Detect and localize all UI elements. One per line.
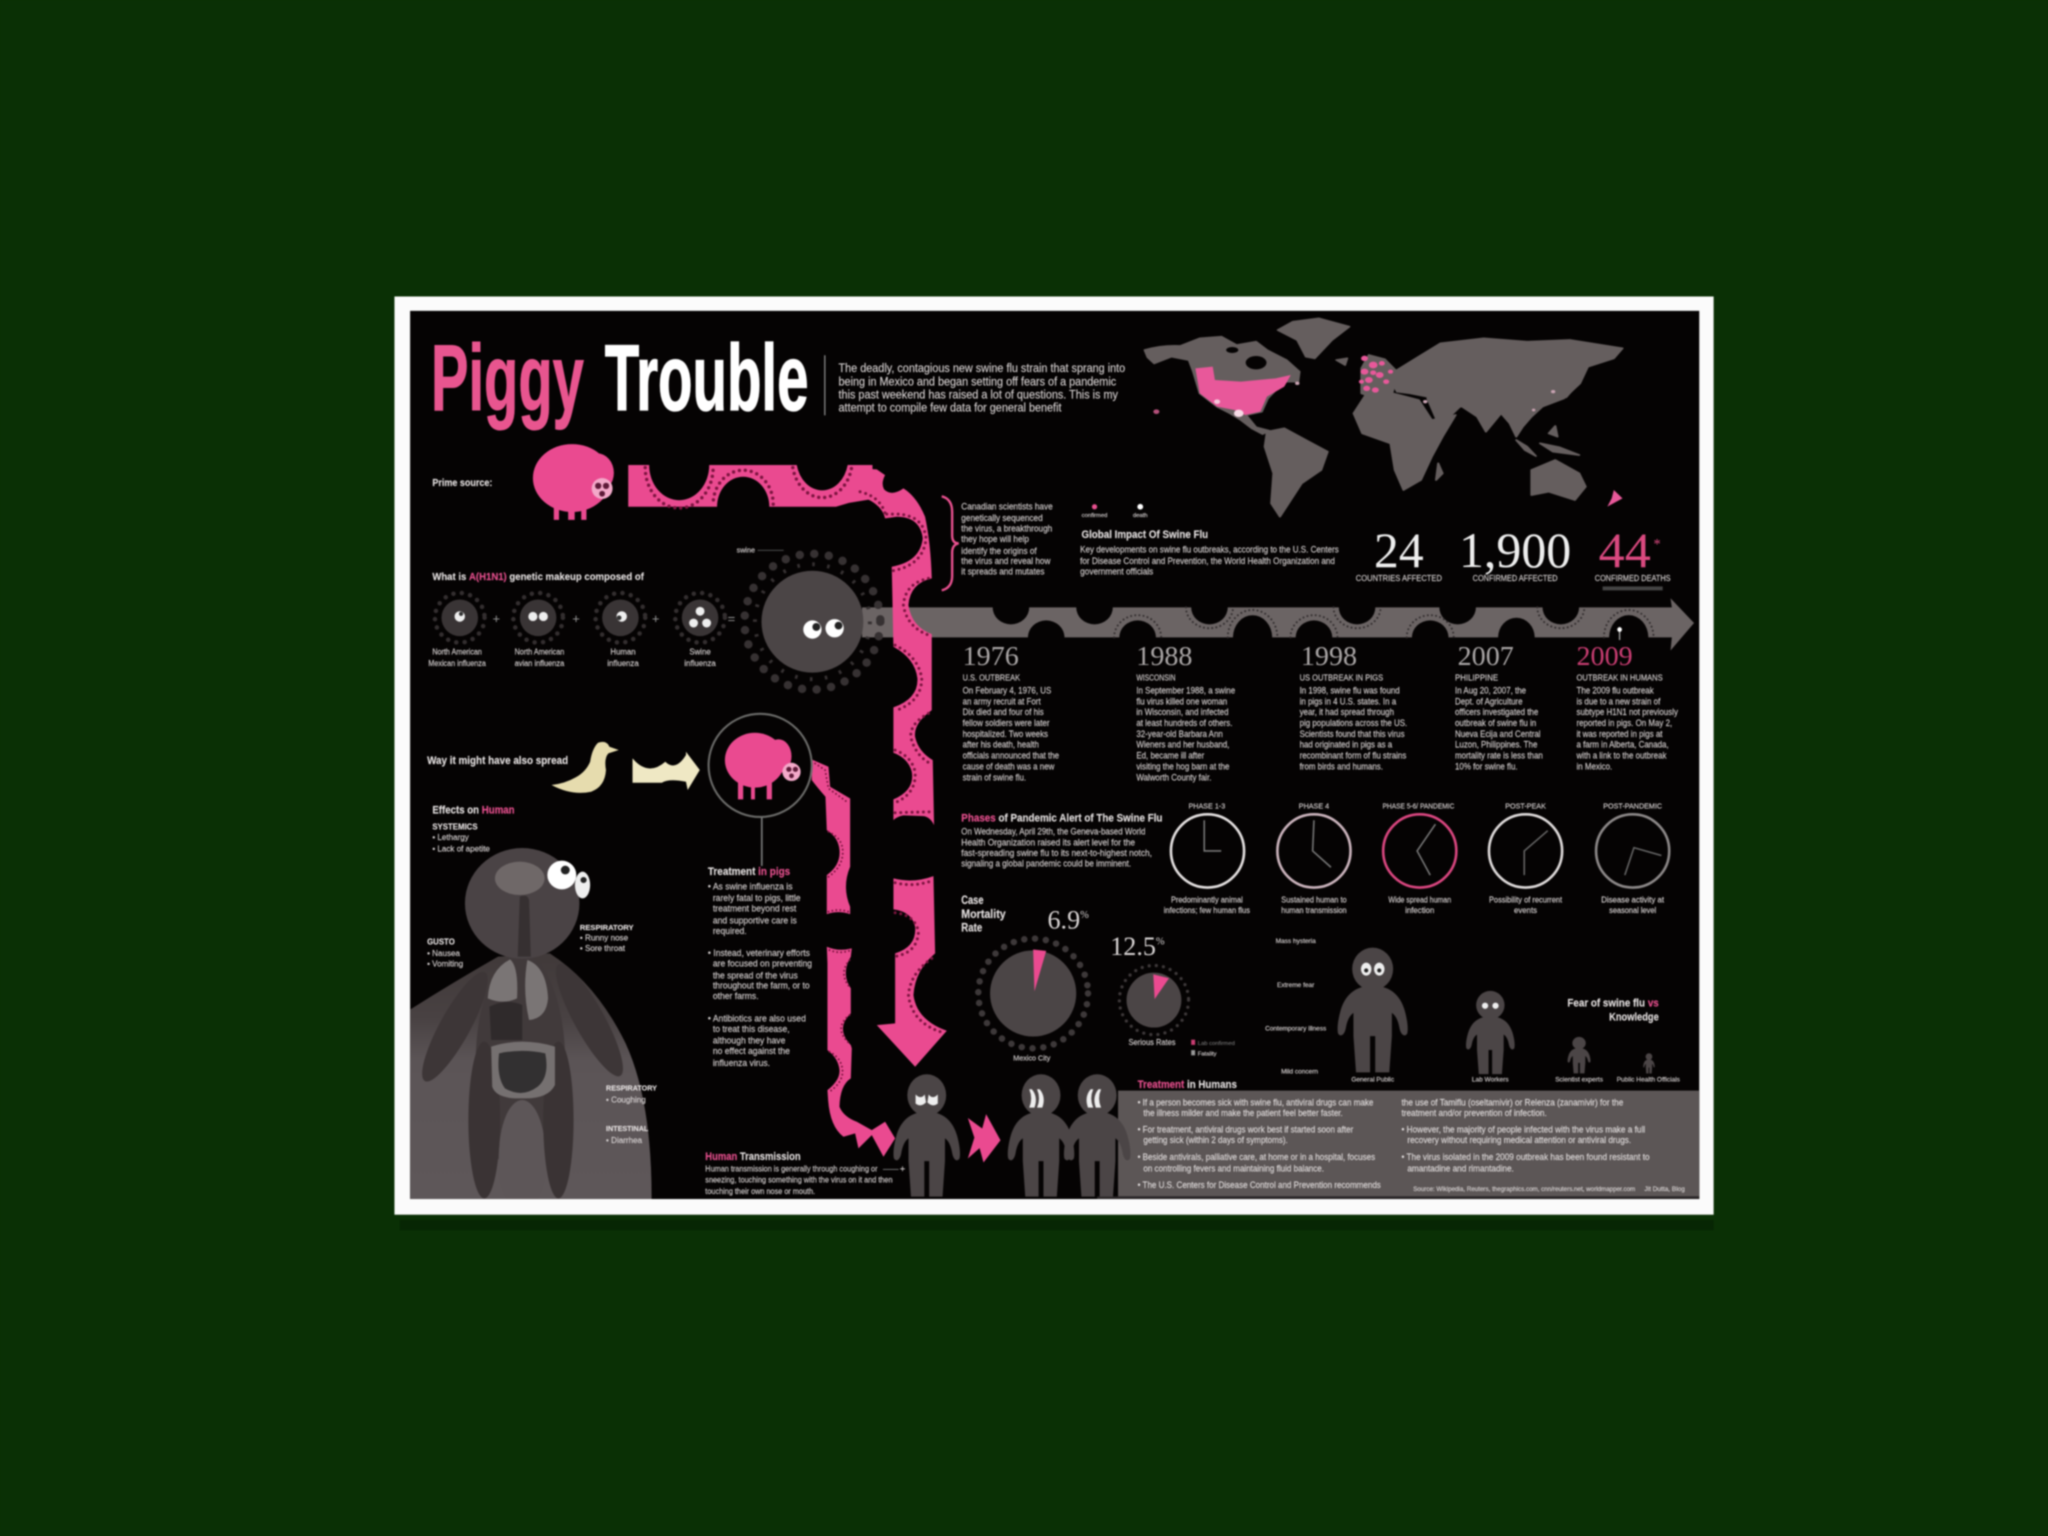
small virus: north american mexican — [428, 593, 486, 668]
stat: confirmed affected: CONFIRMED AFFECTED — [1473, 573, 1558, 583]
small virus: north american avian — [513, 593, 565, 668]
clock: phase 1-3: Predominantly animal — [1171, 896, 1243, 905]
clock: phase 1-3 — [1164, 802, 1250, 915]
map legend: confirmed — [1082, 513, 1107, 519]
small virus: swine: influenza — [684, 659, 716, 668]
treatment in pigs text: the spread of the virus — [713, 970, 798, 980]
gauge: serious rates 12.5%: Serious Rates — [1128, 1038, 1176, 1047]
treatment in humans panel: • The virus isolated in the 2009 outbreak has been found resistant to — [1401, 1152, 1650, 1162]
timeline year 2007: Luzon, Philippines. The — [1455, 739, 1538, 750]
fear chart figure: lab workers: Lab Workers — [1472, 1076, 1509, 1083]
timeline year 1998: had originated in pigs as a — [1300, 739, 1392, 750]
timeline year 2009 — [1576, 641, 1679, 772]
timeline year 2007: 10% for swine flu. — [1455, 761, 1518, 772]
treatment in pigs text: influenza virus. — [713, 1058, 770, 1068]
symptoms: respiratory: • Coughing — [606, 1095, 646, 1104]
case mortality heading: Case — [961, 894, 984, 907]
title — [431, 325, 808, 430]
timeline year 1988: at least hundreds of others. — [1136, 718, 1232, 728]
timeline year 2007 — [1455, 641, 1543, 772]
timeline year 1998: In 1998, swine flu was found — [1300, 685, 1400, 696]
gauge: mexico city 6.9%: Mexico City — [1013, 1055, 1051, 1063]
symptoms: intestinal: INTESTINAL — [606, 1125, 649, 1133]
timeline year 1988: WISCONSIN — [1136, 672, 1176, 682]
poster frame — [394, 296, 1714, 1230]
gauge: serious rates 12.5%: 12.5 — [1110, 932, 1156, 961]
clock: post-peak: Possibility of recurrent — [1489, 896, 1563, 905]
circled pig — [709, 714, 812, 866]
timeline year 1998: 1998 — [1301, 641, 1357, 671]
small virus: north american avian: North American — [515, 647, 564, 656]
small virus: human — [596, 593, 645, 668]
symptoms: nasal: RESPIRATORY — [580, 923, 634, 932]
symptoms: nasal — [580, 923, 634, 953]
treatment in pigs text — [708, 881, 812, 1068]
clock: phase 5-6 pandemic: infection — [1405, 906, 1434, 915]
timeline year 2009: in Mexico. — [1576, 761, 1612, 772]
treatment in humans panel: on controlling fevers and maintaining fluid balance. — [1143, 1163, 1324, 1174]
timeline year 1998: in pigs in 4 U.S. states. In a — [1300, 696, 1396, 707]
clock: phase 4: PHASE 4 — [1299, 802, 1329, 810]
global impact text: for Disease Control and Prevention, the World Health Organization and — [1080, 556, 1335, 566]
global impact text — [1080, 544, 1339, 577]
treatment in humans panel: the illness milder and make the patient feel better faster. — [1143, 1108, 1343, 1118]
plus and equals signs: + — [572, 611, 580, 626]
world map — [1145, 318, 1623, 517]
clock: phase 5-6 pandemic: PHASE 5-6/ PANDEMIC — [1383, 802, 1454, 810]
timeline year 1998: from birds and humans. — [1300, 761, 1383, 772]
symptoms: gastro — [427, 937, 463, 969]
title: Trouble — [605, 325, 808, 430]
timeline year 1988: in Wisconsin, and infected — [1136, 707, 1229, 717]
spread heading: Way it might have also spread — [427, 755, 568, 767]
symptoms: systemic: SYSTEMICS — [432, 822, 478, 831]
brace — [942, 496, 959, 590]
clock: phase 4: human transmission — [1281, 906, 1347, 915]
person: infected human — [893, 1074, 960, 1197]
small virus: human: influenza — [607, 659, 639, 668]
genome note text: the virus, a breakthrough — [961, 523, 1052, 534]
timeline year 2007: mortality rate is less than — [1455, 750, 1543, 761]
symptoms: nasal: • Runny nose — [580, 933, 629, 942]
genome note text: Canadian scientists have — [961, 501, 1053, 511]
icon: pink pig — [533, 444, 614, 520]
timeline year 1976: U.S. OUTBREAK — [963, 672, 1020, 682]
infographic poster on green background — [393, 295, 1715, 1230]
symptoms: systemic: • Lethargy — [432, 833, 470, 842]
fear chart figure: scientist experts — [1555, 1037, 1604, 1083]
phases text: On Wednesday, April 29th, the Geneva-based World — [961, 827, 1145, 837]
fear chart figure: public health officials: Public Health Officials — [1617, 1076, 1681, 1083]
symptoms: systemic: • Lack of apetite — [432, 845, 490, 854]
treatment in pigs text: although they have — [713, 1035, 785, 1046]
clock: post-peak: events — [1514, 906, 1537, 915]
symptoms: systemic — [432, 822, 490, 854]
mortality legend: Fatality — [1198, 1051, 1217, 1057]
phases text — [961, 827, 1152, 869]
case mortality heading: Mortality — [961, 908, 1006, 921]
treatment in humans panel: treatment and/or prevention of infection. — [1401, 1108, 1547, 1118]
timeline year 2007: In Aug 20, 2007, the — [1455, 685, 1526, 696]
genome note text — [961, 501, 1053, 577]
genetic makeup heading: What is A(H1N1) genetic makeup composed of — [432, 572, 644, 583]
timeline year 2007: PHILIPPINE — [1455, 672, 1498, 682]
treatment in humans panel: • For treatment, antiviral drugs work best if started soon after — [1138, 1124, 1353, 1135]
treatment in pigs text: • Antibiotics are also used — [708, 1013, 806, 1023]
clock: post-pandemic: Disease activity at — [1601, 896, 1665, 905]
timeline year 1988 — [1136, 641, 1235, 782]
stat: deaths: CONFIRMED DEATHS — [1595, 573, 1671, 583]
timeline year 1998: year, it had spread through — [1300, 707, 1394, 717]
fear chart heading: Knowledge — [1609, 1012, 1659, 1024]
timeline year 2007: officers investigated the — [1455, 707, 1538, 717]
symptoms: gastro: GUSTO — [427, 937, 455, 946]
gauge: mexico city 6.9%: 6.9 — [1048, 906, 1080, 935]
timeline year 1998: US OUTBREAK IN PIGS — [1300, 672, 1383, 682]
treatment in humans panel: recovery without requiring medical attention or antiviral drugs. — [1407, 1135, 1631, 1145]
plus and equals signs: = — [728, 611, 735, 626]
symptoms: nasal: • Sore throat — [580, 944, 626, 953]
timeline year 2009: OUTBREAK IN HUMANS — [1576, 672, 1663, 682]
timeline year 1988: Walworth County fair. — [1136, 772, 1211, 782]
timeline year 2007: 2007 — [1458, 641, 1514, 671]
clock: post-pandemic: POST-PANDEMIC — [1603, 802, 1662, 810]
gauge: mexico city 6.9% — [978, 906, 1089, 1063]
small virus: swine — [675, 593, 725, 668]
timeline year 2009: it was reported in pigs at — [1576, 728, 1663, 739]
treatment in pigs text: required. — [713, 926, 747, 936]
title divider and intro text: The deadly, contagious new swine flu strain that sprang into — [839, 362, 1125, 375]
mortality legend — [1191, 1040, 1235, 1057]
clock: phase 1-3: infections; few human flus — [1164, 906, 1250, 915]
timeline year 1998: Scientists found that this virus — [1300, 728, 1405, 739]
mortality legend: Lab confirmed — [1198, 1041, 1235, 1047]
timeline year 2007: Dept. of Agriculture — [1455, 696, 1523, 707]
title divider and intro text: attempt to compile few data for general benefit — [839, 401, 1062, 415]
title divider and intro text — [824, 355, 1125, 415]
timeline year 1976: an army recruit at Fort — [963, 696, 1041, 707]
fear chart figure: public health officials — [1617, 1053, 1681, 1083]
fear chart axis labels: Contemporary illness — [1265, 1026, 1327, 1033]
case mortality heading — [961, 894, 1006, 934]
big virus: swine — [737, 546, 755, 554]
prime source label: Prime source: — [432, 478, 492, 489]
clock: phase 4 — [1277, 802, 1351, 915]
fear chart axis labels: Mild concern — [1281, 1069, 1318, 1076]
timeline year 1976 — [963, 641, 1059, 782]
cream arrow — [633, 752, 700, 790]
person: third human — [1064, 1074, 1130, 1197]
genome note text: the virus and reveal how — [961, 556, 1051, 566]
timeline year 1976: fellow soldiers were later — [963, 718, 1050, 728]
stat: confirmed affected: 1,900 — [1459, 523, 1571, 578]
symptoms: respiratory — [606, 1085, 657, 1104]
clock: post-peak — [1489, 802, 1563, 915]
treatment in humans panel: getting sick (within 2 days of symptoms). — [1143, 1135, 1288, 1145]
treatment in pigs text: and supportive care is — [713, 915, 797, 925]
clock: phase 5-6 pandemic — [1383, 802, 1456, 915]
treatment in humans panel: amantadine and rimantadine. — [1407, 1163, 1514, 1174]
person: second human — [1008, 1074, 1074, 1197]
treatment in humans panel: • However, the majority of people infected with the virus make a full — [1401, 1124, 1645, 1135]
stat: countries: COUNTRIES AFFECTED — [1356, 573, 1442, 583]
treatment in humans panel: Jit Dutta, Blog — [1644, 1186, 1685, 1193]
fear chart axis labels: Mass hysteria — [1276, 938, 1316, 945]
gauge: serious rates 12.5%: % — [1156, 936, 1165, 947]
clock: phase 1-3: PHASE 1-3 — [1189, 802, 1225, 810]
clock: post-peak: POST-PEAK — [1505, 802, 1546, 810]
symptoms: respiratory: RESPIRATORY — [606, 1085, 657, 1093]
treatment in pigs text: rarely fatal to pigs, little — [713, 893, 801, 903]
gauge: mexico city 6.9%: % — [1080, 910, 1089, 921]
timeline year 1976: hospitalized. Two weeks — [963, 728, 1048, 739]
genome note text: genetically sequenced — [961, 513, 1043, 523]
fear chart figure: general public — [1338, 948, 1408, 1083]
treatment in pigs text: are focused on preventing — [713, 958, 812, 969]
map legend — [1082, 504, 1148, 519]
treatment in humans panel: • If a person becomes sick with swine flu, antiviral drugs can make — [1138, 1097, 1374, 1107]
genome note text: it spreads and mutates — [961, 566, 1045, 577]
small virus: north american avian: avian influenza — [515, 659, 565, 668]
treatment in humans panel: Treatment in Humans — [1138, 1079, 1237, 1091]
timeline year 1998 — [1300, 641, 1407, 772]
map legend: death — [1133, 513, 1148, 519]
symptoms: intestinal: • Diarrhea — [606, 1136, 643, 1145]
small virus: north american mexican: North American — [432, 647, 482, 656]
stat: deaths — [1595, 523, 1671, 590]
fear chart figure: scientist experts: Scientist experts — [1555, 1076, 1604, 1083]
phases text: fast-spreading swine flu to its next-to-highest notch, — [961, 848, 1152, 858]
virus transmission band from pig to human — [628, 465, 947, 1067]
clock: phase 5-6 pandemic: Wide spread human — [1388, 896, 1451, 905]
plus and equals signs — [493, 611, 735, 626]
case mortality heading: Rate — [961, 921, 983, 934]
treatment in pigs text: no effect against the — [713, 1046, 790, 1056]
timeline year 1988: 1988 — [1136, 641, 1192, 671]
title divider and intro text: being in Mexico and began setting off fears of a pandemic — [839, 375, 1116, 388]
timeline year 1976: strain of swine flu. — [963, 772, 1026, 782]
human transmission: Human transmission is generally through coughing or — [705, 1164, 878, 1174]
timeline year 1976: Dix died and four of his — [963, 707, 1044, 717]
treatment in pigs text: throughout the farm, or to — [713, 980, 810, 991]
icon: duck — [551, 742, 619, 793]
effects on human heading: Effects on Human — [432, 805, 515, 817]
timeline year 1988: Ed, became ill after — [1136, 750, 1204, 761]
timeline year 2009: is due to a new strain of — [1576, 696, 1661, 707]
fear chart figure: lab workers — [1466, 991, 1515, 1083]
treatment in pigs text: other farms. — [713, 991, 759, 1001]
genome note text: identify the origins of — [961, 545, 1037, 556]
plus and equals signs: + — [652, 611, 659, 626]
treatment in humans panel: the use of Tamiflu (oseltamivir) or Relenza (zanamivir) for the — [1401, 1097, 1623, 1107]
treatment in pigs heading: Treatment in pigs — [708, 866, 790, 878]
clock: post-pandemic — [1596, 802, 1669, 915]
treatment in humans panel: Source: Wikipedia, Reuters, thegraphics.com, cnn/reuters.net, worldmapper.com — [1413, 1186, 1635, 1193]
timeline year 2007: Nueva Ecija and Central — [1455, 728, 1541, 739]
phases text: Health Organization raised its alert level for the — [961, 837, 1135, 847]
fear chart heading: Fear of swine flu vs — [1567, 997, 1659, 1009]
second transmission band from pig to person — [812, 759, 895, 1157]
clock: phase 4: Sustained human to — [1281, 896, 1347, 905]
timeline year 1988: In September 1988, a swine — [1136, 685, 1235, 696]
timeline year 1976: after his death, health — [963, 739, 1039, 750]
timeline year 2009: reported in pigs. On May 2, — [1576, 718, 1672, 728]
symptoms: gastro: • Vomiting — [427, 960, 463, 969]
timeline arrow band — [862, 598, 1694, 650]
treatment in humans panel: • The U.S. Centers for Disease Control and Prevention recommends — [1138, 1180, 1381, 1190]
phases text: signaling a global pandemic could be imminent. — [961, 859, 1131, 869]
clock: post-pandemic: seasonal level — [1609, 906, 1656, 915]
timeline year 2009: a farm in Alberta, Canada, — [1576, 739, 1669, 750]
timeline year 2009: with a link to the outbreak — [1576, 750, 1667, 761]
gauge: serious rates 12.5% — [1110, 932, 1189, 1047]
fear chart figure: general public: General Public — [1351, 1076, 1395, 1083]
timeline year 2007: outbreak of swine flu in — [1455, 718, 1536, 728]
symptoms: intestinal — [606, 1125, 649, 1145]
timeline year 1988: Wieners and her husband, — [1136, 739, 1229, 750]
treatment in humans panel — [1097, 1079, 1699, 1199]
anatomy figure — [408, 848, 652, 1213]
timeline year 1976: cause of death was a new — [963, 761, 1055, 772]
global impact text: government officials — [1080, 567, 1154, 577]
small virus: swine: Swine — [689, 647, 711, 656]
timeline year 1988: visiting the hog barn at the — [1136, 761, 1230, 772]
stat: countries — [1356, 523, 1442, 583]
big virus — [737, 546, 880, 690]
global impact heading: Global Impact Of Swine Flu — [1081, 529, 1208, 541]
title divider and intro text: this past weekend has raised a lot of questions. This is my — [839, 388, 1118, 402]
symptoms: gastro: • Nausea — [427, 949, 461, 958]
small virus: north american mexican: Mexican influenza — [428, 659, 486, 668]
human transmission — [705, 1151, 905, 1196]
human transmission: + — [900, 1164, 905, 1174]
phases heading: Phases of Pandemic Alert of The Swine Flu — [961, 813, 1163, 825]
stat: deaths: 44 — [1599, 523, 1651, 578]
small virus: human: Human — [610, 647, 636, 656]
arrow between persons — [968, 1114, 1000, 1162]
fear chart axis labels: Extreme fear — [1277, 982, 1315, 989]
timeline year 2009: 2009 — [1576, 641, 1633, 671]
treatment in pigs text: • As swine influenza is — [708, 881, 793, 892]
stat: deaths: * — [1654, 537, 1661, 553]
timeline year 1976: On February 4, 1976, US — [963, 685, 1052, 696]
global impact text: Key developments on swine flu outbreaks, according to the U.S. Centers — [1080, 544, 1339, 554]
timeline year 1998: recombinant form of flu strains — [1300, 750, 1406, 761]
fear chart heading — [1567, 997, 1659, 1024]
title: Piggy — [431, 325, 584, 430]
genome note text: they hope will help — [961, 534, 1029, 544]
plus and equals signs: + — [493, 611, 500, 626]
human transmission: sneezing, touching something with the virus on it and then — [705, 1175, 893, 1185]
timeline year 1976: 1976 — [963, 641, 1019, 671]
timeline year 2009: subtype H1N1 not previously — [1576, 707, 1679, 717]
timeline year 1988: 32-year-old Barbara Ann — [1136, 728, 1223, 739]
treatment in pigs text: treatment beyond rest — [713, 903, 797, 914]
timeline year 1976: officials announced that the — [963, 750, 1059, 761]
fear chart axis labels — [1265, 938, 1327, 1076]
stat: countries: 24 — [1374, 523, 1424, 578]
human transmission: touching their own nose or mouth. — [705, 1186, 815, 1196]
human transmission: Human Transmission — [705, 1151, 801, 1163]
treatment in pigs text: • Instead, veterinary efforts — [708, 948, 811, 958]
timeline year 1988: flu virus killed one woman — [1136, 696, 1227, 707]
treatment in pigs text: to treat this disease, — [713, 1024, 790, 1034]
timeline year 2009: The 2009 flu outbreak — [1576, 685, 1654, 696]
treatment in humans panel: • Beside antivirals, palliative care, at home or in a hospital, focuses — [1138, 1152, 1375, 1162]
timeline year 1998: pig populations across the US. — [1300, 718, 1407, 728]
